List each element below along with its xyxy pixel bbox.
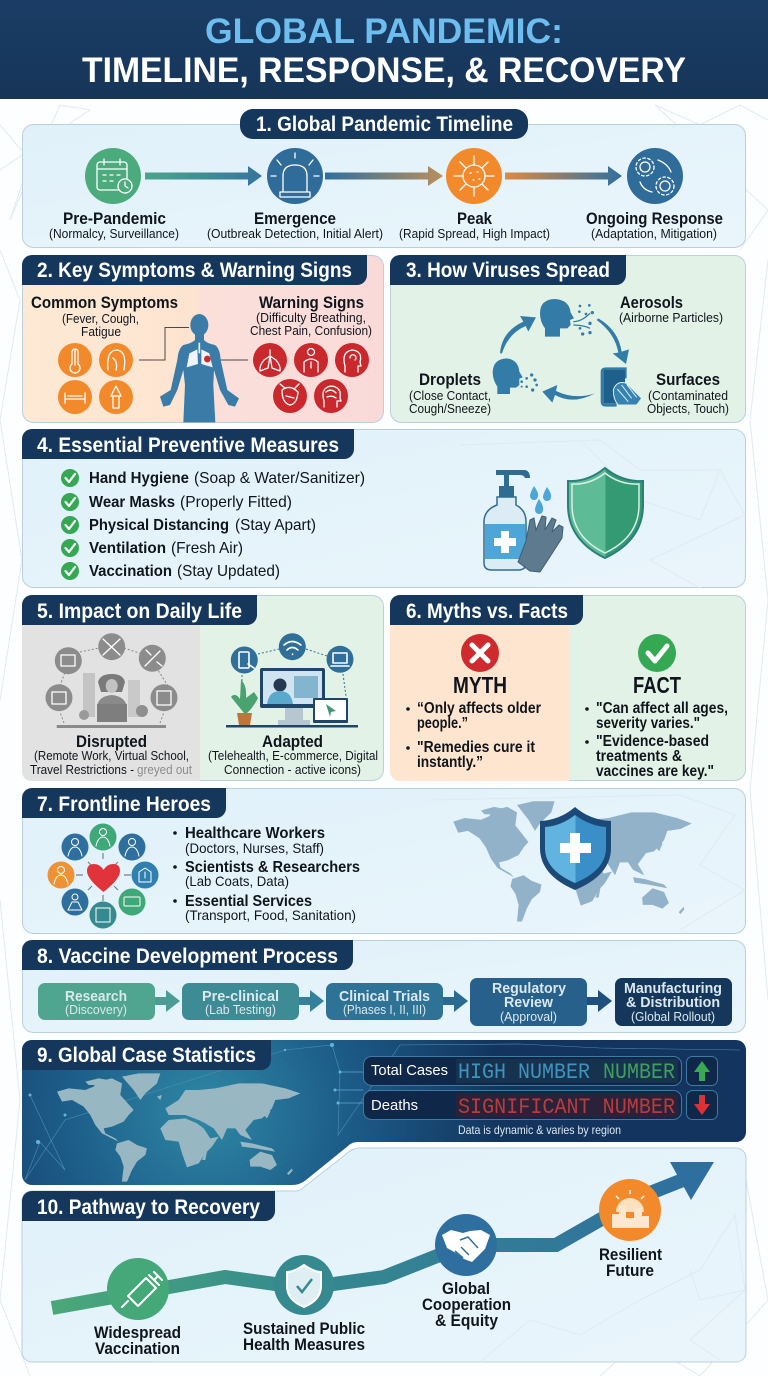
adapted label — [208, 732, 378, 777]
panel 8 heading: 8. Vaccine Development Process — [37, 945, 338, 968]
step: clinical trials — [326, 983, 443, 1020]
stage: peak: Peak — [457, 209, 492, 228]
stat row: deaths — [364, 1090, 682, 1120]
item: vaccination: Vaccination — [89, 563, 172, 580]
myth column: “Only affects older — [417, 700, 541, 717]
header banner — [0, 0, 768, 99]
item: healthcare workers: (Doctors, Nurses, Staff) — [185, 840, 324, 856]
milestone label: cooperation — [422, 1279, 511, 1330]
icon: alert beacon — [267, 148, 323, 204]
recovery path arrow — [52, 1162, 714, 1308]
adapted label: Adapted — [262, 732, 323, 751]
panel 6 heading — [390, 595, 583, 625]
item: physical distancing: Physical Distancing — [89, 517, 229, 534]
milestone icon: vaccination — [107, 1258, 169, 1320]
item: wear masks: (Properly Fitted) — [180, 494, 292, 511]
stat row: total cases — [364, 1056, 682, 1086]
title line 2: TIMELINE, RESPONSE, & RECOVERY — [82, 51, 686, 90]
step: manufacturing: Manufacturing — [624, 980, 722, 997]
item: essential services: (Transport, Food, Sanitation) — [185, 907, 356, 923]
fact column: FACT — [633, 672, 681, 698]
item: essential services: Essential Services — [185, 893, 312, 910]
trend arrow up — [686, 1056, 718, 1086]
connector lines — [139, 328, 248, 360]
arrow: surfaces to droplets — [542, 385, 595, 403]
disrupted label: greyed out — [137, 762, 192, 777]
human body figure — [160, 314, 239, 422]
droplets label: (Close Contact, — [409, 388, 491, 403]
panel 5 heading: 5. Impact on Daily Life — [37, 600, 242, 623]
milestone label: resilient future — [599, 1245, 662, 1280]
item: scientists: (Lab Coats, Data) — [185, 873, 289, 889]
trend arrow down — [686, 1090, 718, 1120]
stage: emergence: (Outbreak Detection, Initial Alert) — [207, 226, 383, 241]
icon: gears — [627, 148, 683, 204]
stage: peak — [399, 209, 550, 241]
title line 1: GLOBAL PANDEMIC: — [205, 12, 563, 51]
item: essential services — [173, 893, 356, 923]
checklist — [61, 469, 365, 580]
droplets label — [409, 370, 491, 416]
surfaces label — [647, 370, 729, 416]
dotted world map — [57, 1073, 300, 1182]
fact column: severity varies." — [596, 715, 700, 732]
warning signs text: Chest Pain, Confusion) — [250, 323, 372, 338]
illustration: disrupted — [46, 633, 178, 728]
panel 4: preventive measures — [22, 429, 746, 588]
item: vaccination — [61, 562, 280, 580]
arrow: peak to ongoing response — [505, 166, 622, 186]
step: regulatory review: Review — [504, 994, 553, 1011]
item: wear masks: Wear Masks — [89, 494, 175, 511]
panel 1: timeline — [22, 109, 746, 248]
aerosols label: (Airborne Particles) — [619, 310, 723, 325]
fact column: vaccines are key." — [596, 763, 714, 780]
item: scientists — [173, 859, 360, 889]
stage: ongoing response: (Adaptation, Mitigation) — [591, 226, 717, 241]
item: ventilation — [61, 539, 243, 557]
stat row: total cases: HIGH NUMBER — [458, 1060, 590, 1085]
stat row: deaths: Deaths — [371, 1097, 418, 1114]
step: research — [38, 983, 155, 1020]
panel 2: symptoms — [22, 255, 384, 422]
item: ventilation: Ventilation — [89, 540, 166, 557]
step: research: Research — [65, 988, 127, 1005]
item: healthcare workers — [173, 825, 325, 856]
arrow — [587, 990, 612, 1012]
stage: pre-pandemic — [49, 209, 179, 241]
panel 3: virus spread — [390, 255, 746, 422]
stage: ongoing response: Ongoing Response — [586, 209, 723, 228]
panel 6: myths vs facts — [390, 595, 746, 781]
orange symptom icons — [58, 343, 133, 414]
icon: sanitizer bottle and glove — [484, 470, 563, 572]
arrow — [443, 990, 468, 1012]
item: scientists: Scientists & Researchers — [185, 859, 360, 876]
step: pre-clinical — [182, 983, 299, 1020]
milestone label: resilient future: Future — [606, 1261, 654, 1280]
icon: red cross — [461, 634, 499, 672]
illustration: adapted — [226, 633, 358, 728]
myth column: MYTH — [453, 672, 507, 698]
panel 10 heading: 10. Pathway to Recovery — [37, 1196, 260, 1219]
milestone icon: shield check — [274, 1255, 334, 1315]
fact column: "Can affect all ages, — [596, 700, 728, 717]
common symptoms text: Common Symptoms — [31, 293, 178, 312]
milestone label: public health: Sustained Public — [243, 1319, 365, 1338]
item: physical distancing — [61, 516, 316, 534]
myth column: people.” — [417, 715, 468, 732]
item: wear masks — [61, 493, 292, 511]
stat row: deaths: SIGNIFICANT NUMBER — [458, 1095, 675, 1120]
stage: emergence — [207, 209, 383, 241]
step: manufacturing: & Distribution — [626, 994, 720, 1011]
icon: head coughing droplets — [493, 358, 538, 394]
disrupted label — [30, 732, 192, 777]
fact column — [585, 634, 728, 780]
item: ventilation: (Fresh Air) — [171, 540, 243, 557]
milestone icon: sunrise city — [599, 1179, 661, 1241]
panel 1 heading: 1. Global Pandemic Timeline — [256, 113, 513, 136]
world map — [453, 801, 692, 922]
surfaces label: Surfaces — [656, 370, 720, 389]
red warning icons — [253, 343, 369, 413]
step: pre-clinical: Pre-clinical — [202, 988, 279, 1005]
panel 4 heading: 4. Essential Preventive Measures — [37, 434, 339, 457]
milestone label: resilient future: Resilient — [599, 1245, 662, 1264]
adapted label: Connection - active icons) — [224, 762, 361, 777]
fact column: "Evidence-based — [596, 733, 709, 750]
milestone label: vaccination: Widespread — [94, 1323, 181, 1342]
arrow — [299, 990, 324, 1012]
item: hand hygiene — [61, 469, 365, 487]
panel 3 heading: 3. How Viruses Spread — [406, 259, 610, 282]
step: regulatory review: Regulatory — [492, 980, 567, 997]
arrow: emergence to peak — [325, 166, 443, 186]
panel 6 heading: 6. Myths vs. Facts — [406, 600, 568, 623]
stage: pre-pandemic: Pre-Pandemic — [63, 209, 166, 228]
item: hand hygiene: (Soap & Water/Sanitizer) — [194, 470, 365, 487]
icon: green shield — [568, 468, 643, 558]
panel 9 heading — [22, 1040, 271, 1070]
stat row: total cases: Total Cases — [371, 1062, 448, 1079]
panel 5: daily life — [22, 595, 384, 781]
panel 8: vaccine process — [22, 940, 746, 1032]
icon: head exhaling aerosols — [540, 299, 594, 337]
milestone label: public health: Health Measures — [243, 1335, 365, 1354]
step: regulatory review: (Approval) — [500, 1009, 557, 1024]
arrow — [155, 990, 180, 1012]
droplets label: Droplets — [419, 370, 481, 389]
panel 10: pathway to recovery — [22, 1148, 746, 1362]
stage: ongoing response — [586, 209, 723, 241]
common symptoms text: (Fever, Cough, — [62, 311, 139, 326]
icon: blue shield with cross — [540, 807, 611, 890]
stage: pre-pandemic: (Normalcy, Surveillance) — [49, 226, 179, 241]
milestone label: cooperation: & Equity — [435, 1311, 498, 1330]
panel 2 heading: 2. Key Symptoms & Warning Signs — [37, 259, 352, 282]
milestone label: cooperation: Cooperation — [422, 1295, 511, 1314]
warning signs text: (Difficulty Breathing, — [256, 310, 366, 325]
myth column — [406, 634, 541, 771]
milestone icon: handshake — [435, 1214, 497, 1276]
surfaces label: (Contaminated — [648, 388, 728, 403]
adapted label: (Telehealth, E-commerce, Digital — [208, 748, 378, 763]
icon: green check — [638, 634, 676, 672]
disrupted label: Travel Restrictions - — [30, 762, 134, 777]
icon: hand on surface — [601, 367, 642, 407]
warning signs text — [250, 293, 372, 338]
panel 9 heading: 9. Global Case Statistics — [37, 1044, 256, 1067]
step: manufacturing: (Global Rollout) — [631, 1009, 715, 1024]
disrupted label: (Remote Work, Virtual School, — [34, 748, 189, 763]
arrow: pre-pandemic to emergence — [145, 166, 262, 186]
step: clinical trials: (Phases I, II, III) — [343, 1002, 426, 1017]
myth column: instantly.” — [417, 754, 483, 771]
item: vaccination: (Stay Updated) — [177, 563, 280, 580]
milestone label: cooperation: Global — [442, 1279, 490, 1298]
aerosols label — [619, 293, 723, 325]
milestone label: vaccination — [94, 1323, 181, 1358]
data note: Data is dynamic & varies by region — [458, 1123, 621, 1137]
droplets label: Cough/Sneeze) — [409, 401, 491, 416]
common symptoms text: Fatigue — [81, 324, 121, 339]
item: physical distancing: (Stay Apart) — [235, 517, 316, 534]
panel 7 heading: 7. Frontline Heroes — [37, 793, 211, 816]
icon: calendar — [85, 148, 141, 204]
disrupted label: Disrupted — [76, 732, 147, 751]
milestone label: public health — [243, 1319, 365, 1354]
icon: ring of workers around heart — [48, 824, 158, 928]
arrow: aerosols to surfaces — [597, 318, 629, 364]
step: clinical trials: Clinical Trials — [339, 988, 430, 1005]
warning signs text: Warning Signs — [259, 293, 364, 312]
stage: emergence: Emergence — [254, 209, 336, 228]
stat row: total cases: NUMBER — [603, 1060, 675, 1085]
step: research: (Discovery) — [65, 1002, 127, 1017]
item: healthcare workers: Healthcare Workers — [185, 825, 325, 842]
step: manufacturing — [615, 978, 732, 1026]
panel 7: frontline heroes — [22, 788, 746, 934]
aerosols label: Aerosols — [620, 293, 683, 312]
common symptoms text — [31, 293, 178, 339]
arrow: droplets to aerosols — [500, 316, 536, 353]
fact column: treatments & — [596, 748, 682, 765]
surfaces label: Objects, Touch) — [647, 401, 729, 416]
step: pre-clinical: (Lab Testing) — [205, 1002, 276, 1017]
myth column: "Remedies cure it — [417, 739, 536, 756]
step: regulatory review — [470, 978, 587, 1026]
panel 9: case statistics — [22, 1040, 746, 1185]
stage: peak: (Rapid Spread, High Impact) — [399, 226, 550, 241]
milestone label: vaccination: Vaccination — [95, 1339, 180, 1358]
item: hand hygiene: Hand Hygiene — [89, 470, 189, 487]
icon: virus — [446, 148, 502, 204]
